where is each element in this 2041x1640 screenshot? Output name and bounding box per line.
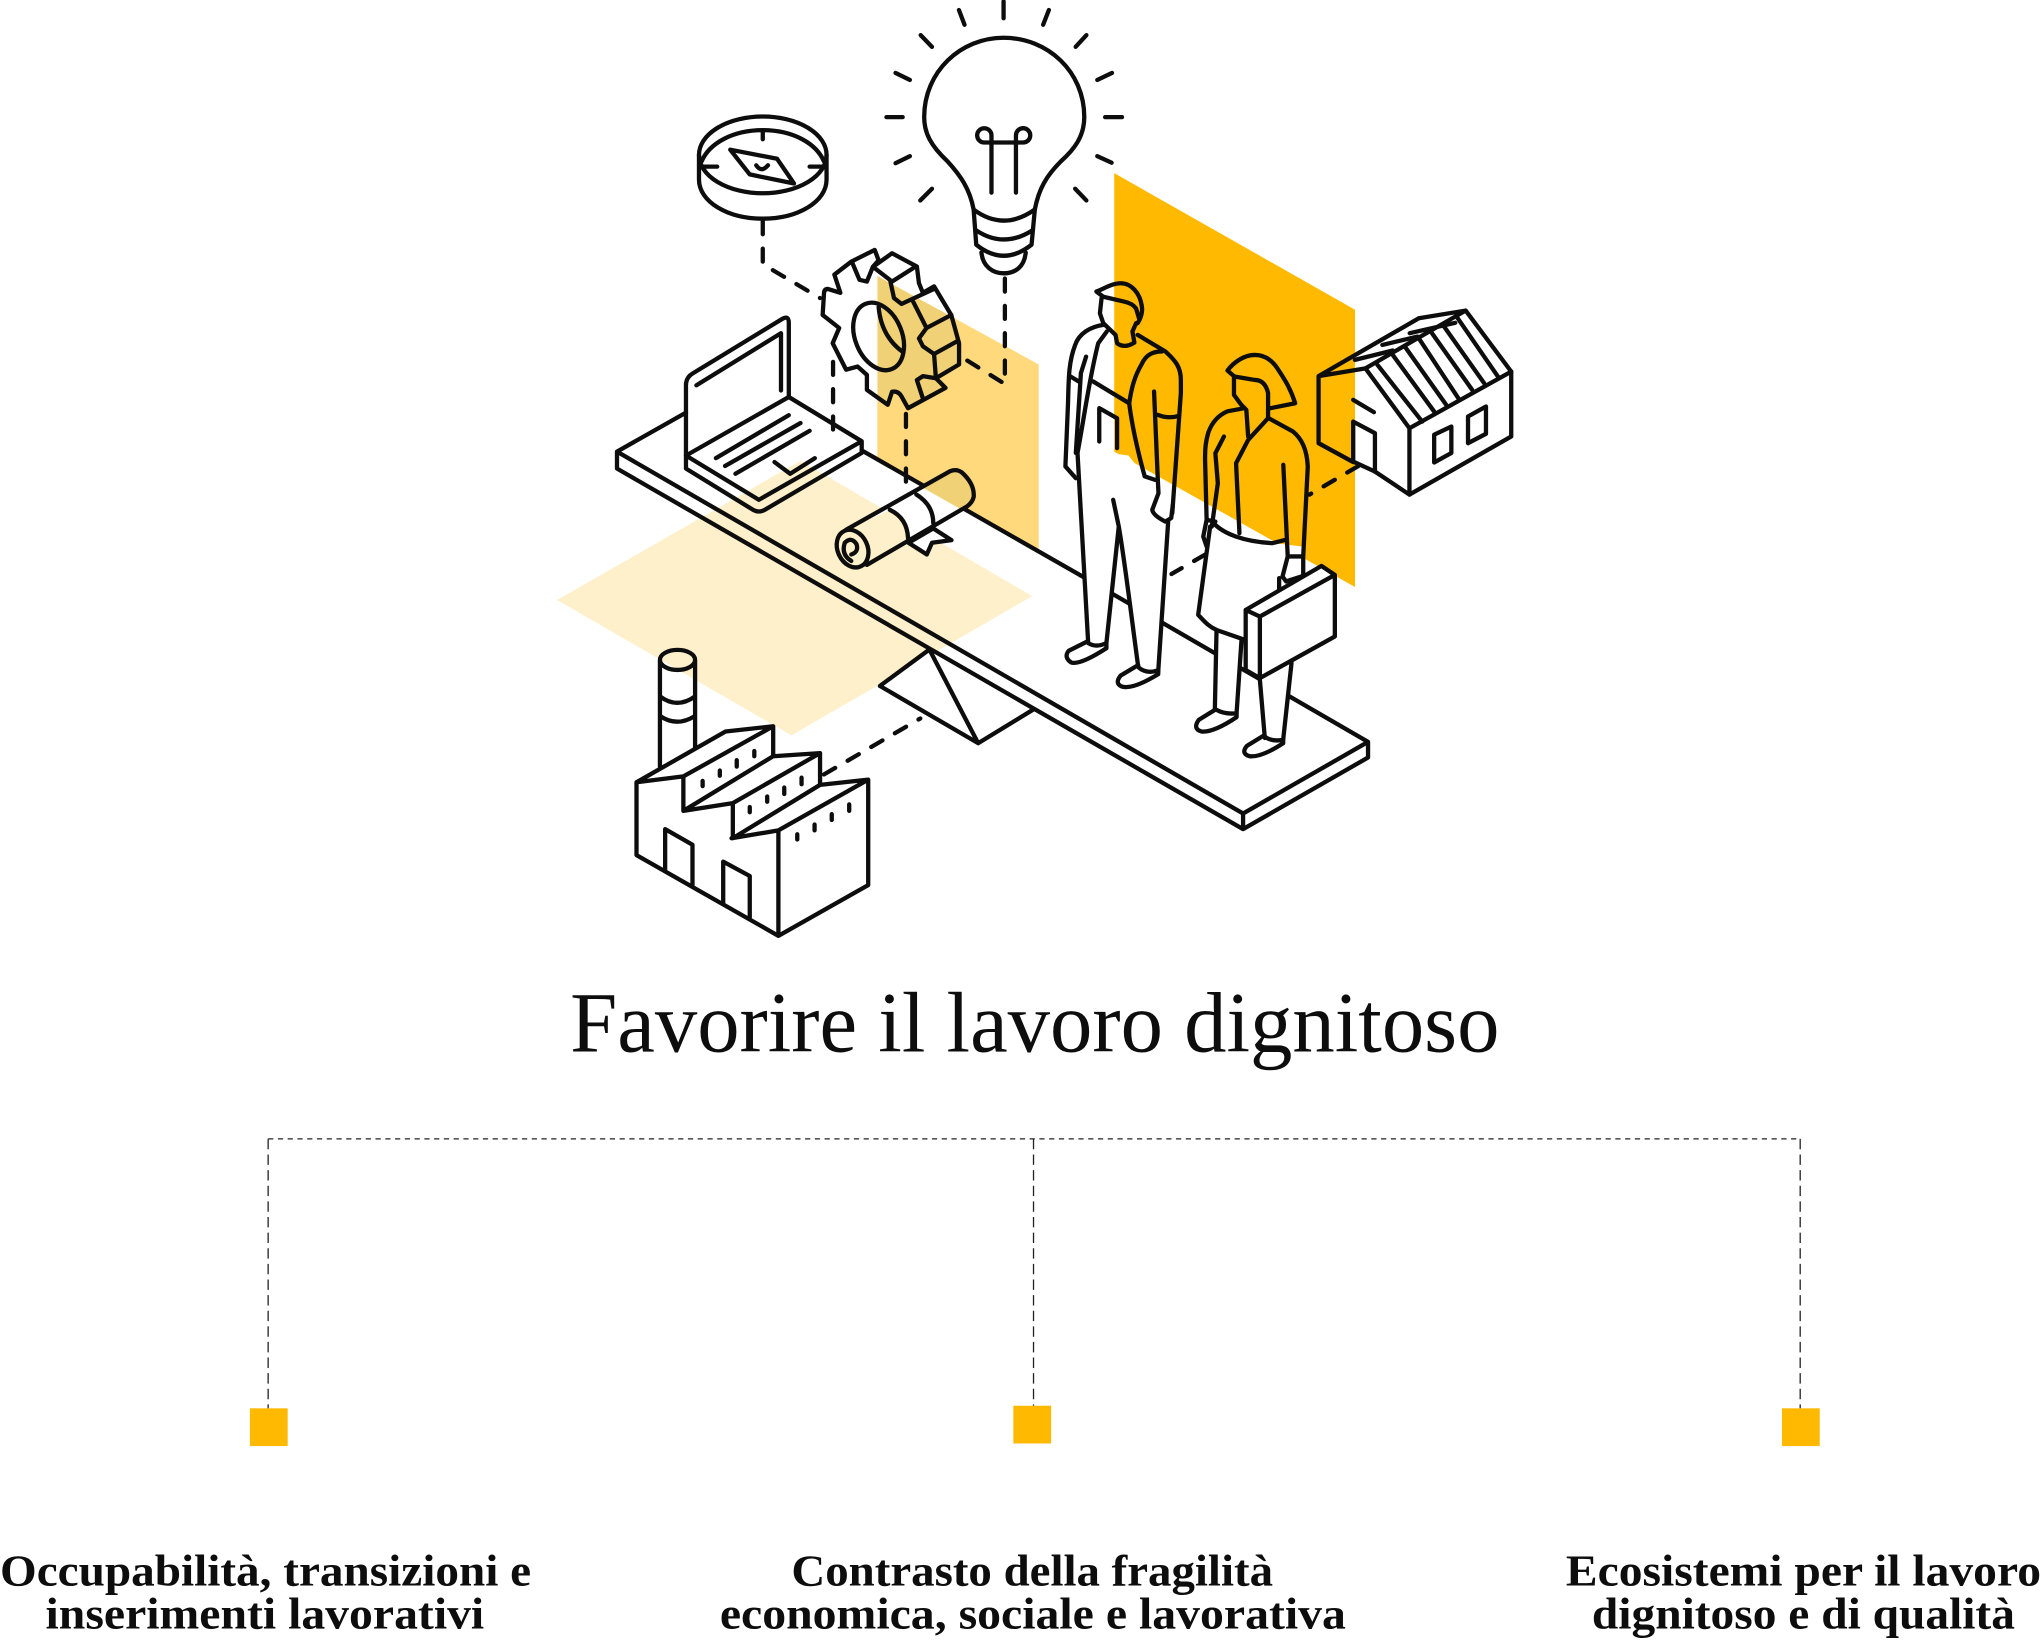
platform outline [617,413,1368,829]
diploma scroll [831,470,974,573]
label: centre: Contrasto della fragilità [791,1546,1273,1595]
woman skirt and legs fill [1199,523,1303,739]
man legs fill [1079,449,1168,672]
panel: pale yellow floor diamond [557,461,1032,735]
label: left: inserimenti lavorativi [46,1589,484,1638]
chimney [660,650,695,767]
icon: compass [699,116,827,219]
panel: mid yellow backdrop [877,276,1039,553]
label: centre [720,1546,1346,1638]
label: right [1566,1546,2041,1638]
dashed tree connector [268,1139,1800,1408]
gear [823,250,959,408]
marker: centre square [1013,1406,1051,1443]
label: right: Ecosistemi per il lavoro [1566,1546,2041,1595]
label: left [0,1546,531,1638]
illustration: balance with work symbols [557,1,1511,936]
marker: right square [1782,1408,1820,1446]
platform back edge [862,450,1080,575]
platform surface [617,380,1368,829]
label: left: Occupabilità, transizioni e [0,1546,531,1595]
bulb rays [886,1,1122,200]
panel: bright yellow backdrop [1114,173,1355,587]
figure: man [1065,283,1181,688]
fulcrum [880,649,1034,743]
icon: house [1319,311,1511,495]
title: Favorire il lavoro dignitoso [570,975,1500,1071]
laptop [686,318,862,512]
dashed connectors [763,221,1358,774]
icon: light bulb [886,1,1122,273]
figure: woman [1196,355,1308,756]
marker: left square [250,1408,288,1446]
laptop fill [686,316,862,513]
label: centre: economica, sociale e lavorativa [720,1589,1346,1638]
icon: briefcase [1246,566,1335,678]
icon: factory [637,650,868,936]
label: right: dignitoso e di qualità [1592,1589,2015,1638]
